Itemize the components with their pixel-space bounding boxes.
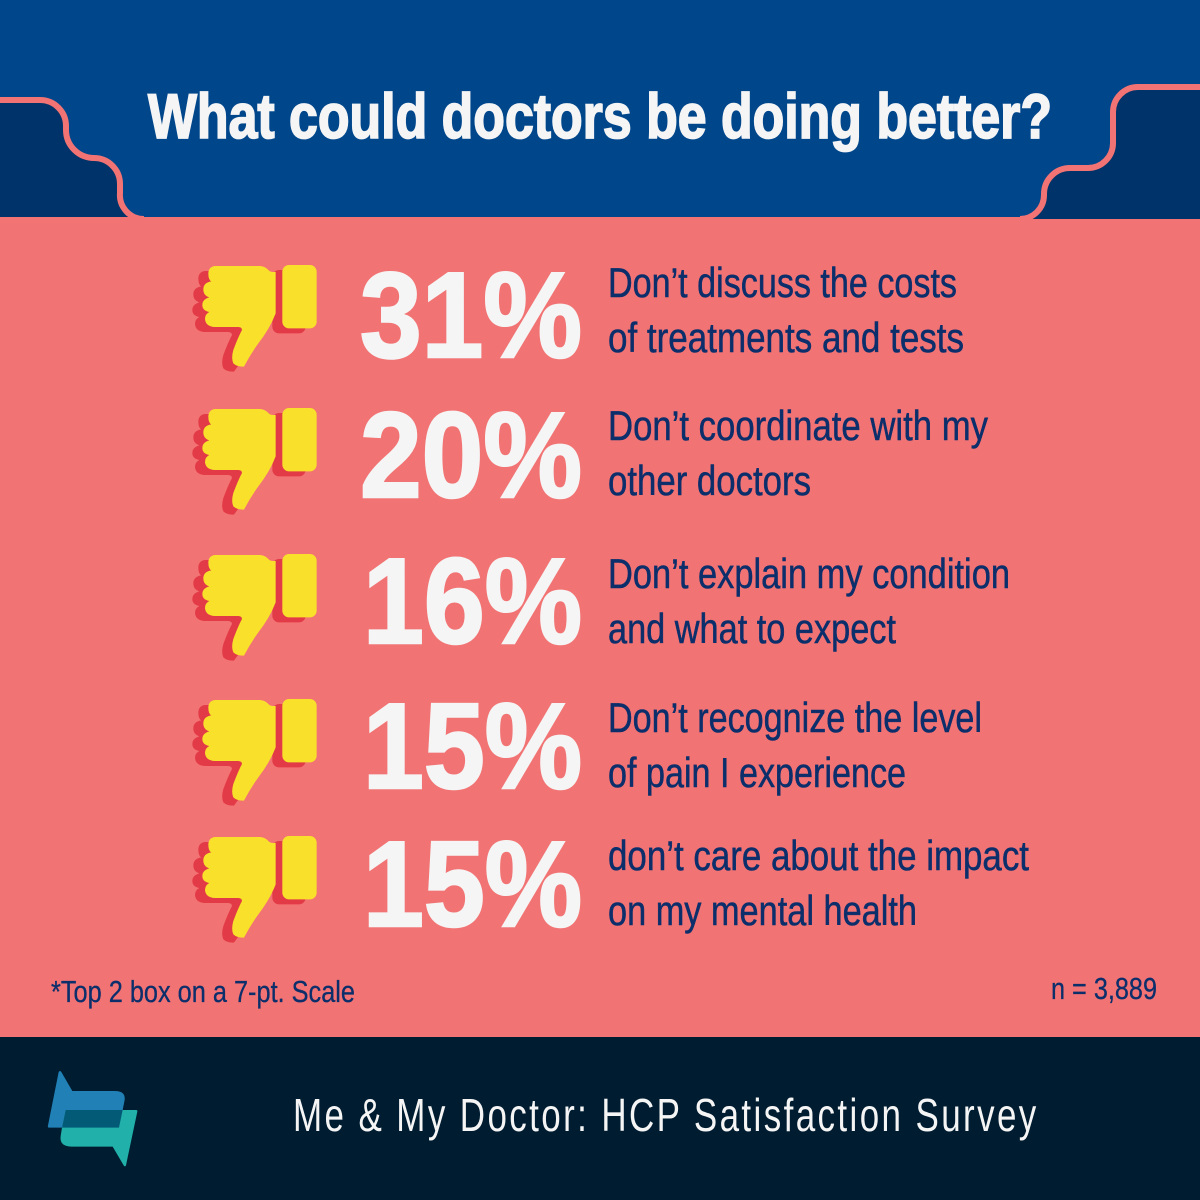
text: pain: Don’t recognize the level <box>608 694 982 741</box>
text: coordination <box>608 402 988 504</box>
text: costs: of treatments and tests <box>608 314 964 361</box>
text: pain <box>608 694 982 796</box>
left header corner <box>0 100 144 217</box>
footnote: *Top 2 box on a 7-pt. Scale <box>51 974 355 1009</box>
text: explanation: and what to expect <box>608 605 896 652</box>
icon: thumbs down <box>192 699 317 806</box>
text: coordination: other doctors <box>608 457 811 504</box>
footer band <box>0 1037 1200 1200</box>
row 1: costs <box>192 247 964 383</box>
text: costs <box>608 259 964 361</box>
icon: thumbs down <box>192 554 317 661</box>
row 2: coordination <box>192 387 988 523</box>
icon: thumbs down <box>192 836 317 943</box>
text: costs: Don’t discuss the costs <box>608 259 957 306</box>
sample size: n = 3,889 <box>1051 971 1157 1006</box>
stat: 15%: 15% <box>363 678 582 814</box>
header band <box>0 0 1200 219</box>
text: mental health <box>608 832 1029 934</box>
text: coordination: Don’t coordinate with my <box>608 402 988 449</box>
row 5: mental health <box>192 816 1029 952</box>
icon: logo speech bubbles <box>48 1071 137 1166</box>
text: mental health: don’t care about the impact <box>608 832 1029 879</box>
text: mental health: on my mental health <box>608 887 917 934</box>
text: explanation <box>608 550 1010 652</box>
right header corner <box>1020 87 1200 219</box>
row 4: pain <box>192 678 982 814</box>
icon: thumbs down <box>192 408 317 515</box>
text: explanation: Don’t explain my condition <box>608 550 1010 597</box>
stat: 20%: 20% <box>360 387 582 523</box>
text: pain: of pain I experience <box>608 749 906 796</box>
stat: 15%: 15% <box>363 816 582 952</box>
stat: 16%: 16% <box>363 533 582 669</box>
footer title: Me & My Doctor: HCP Satisfaction Survey <box>293 1089 1037 1141</box>
row 3: explanation <box>192 533 1010 669</box>
stat: 31%: 31% <box>360 247 582 383</box>
icon: thumbs down <box>192 265 317 372</box>
